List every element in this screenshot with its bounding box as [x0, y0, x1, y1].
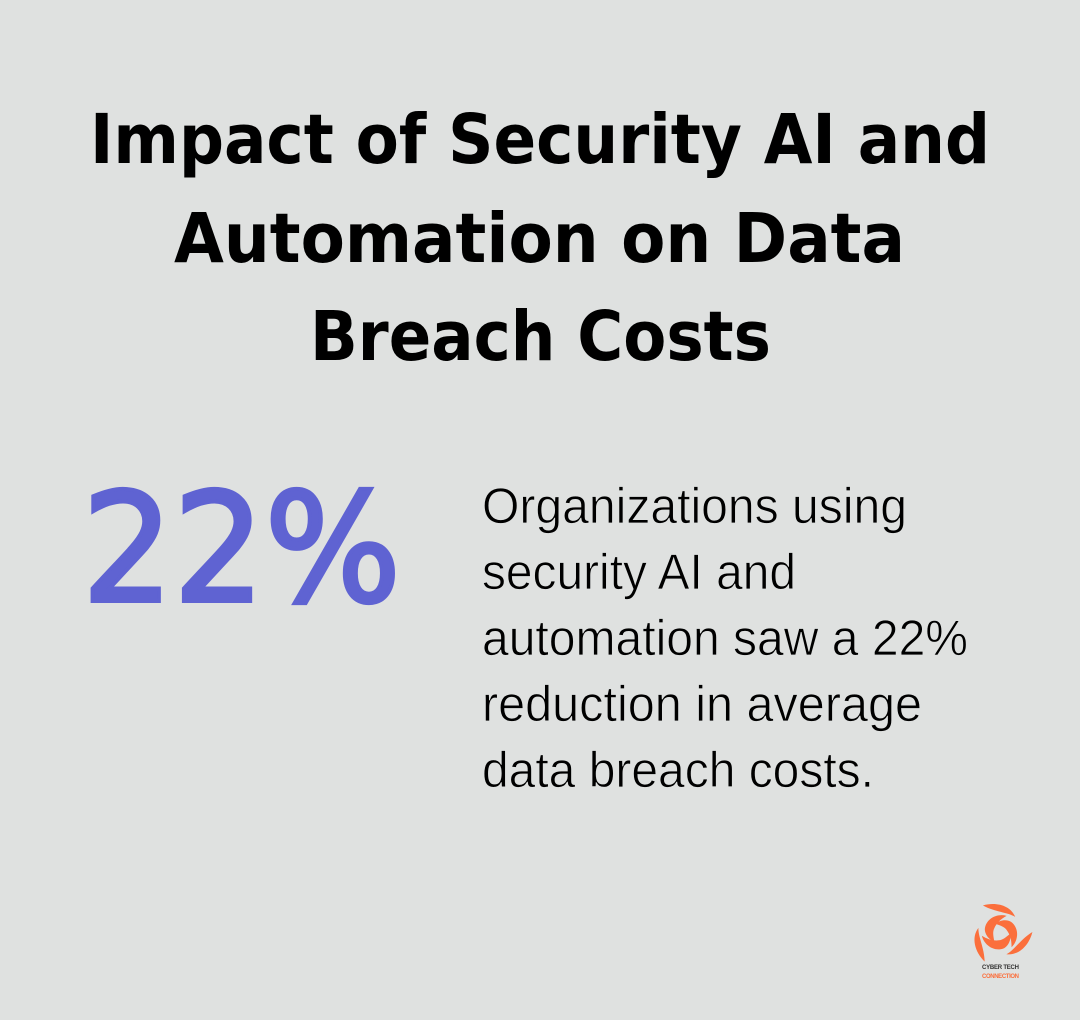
description text — [482, 478, 968, 798]
description text: reduction in average — [482, 676, 922, 732]
icon: three-blade orange swirl — [967, 904, 1034, 962]
description text: data breach costs. — [482, 742, 874, 798]
title: Automation on Data — [174, 199, 905, 279]
description text: automation saw a 22% — [482, 610, 968, 666]
title: Impact of Security AI and — [90, 100, 990, 180]
description text: security AI and — [482, 544, 796, 600]
logo text: CYBER TECH: CYBER TECH — [982, 965, 1019, 971]
description text: Organizations using — [482, 478, 907, 534]
big stat: 22%: 22% — [82, 461, 401, 637]
logo text: CONNECTION: CONNECTION — [982, 974, 1019, 980]
title — [90, 100, 990, 377]
logo: Cyber Tech Connection — [967, 904, 1034, 980]
title: Breach Costs — [310, 297, 771, 377]
